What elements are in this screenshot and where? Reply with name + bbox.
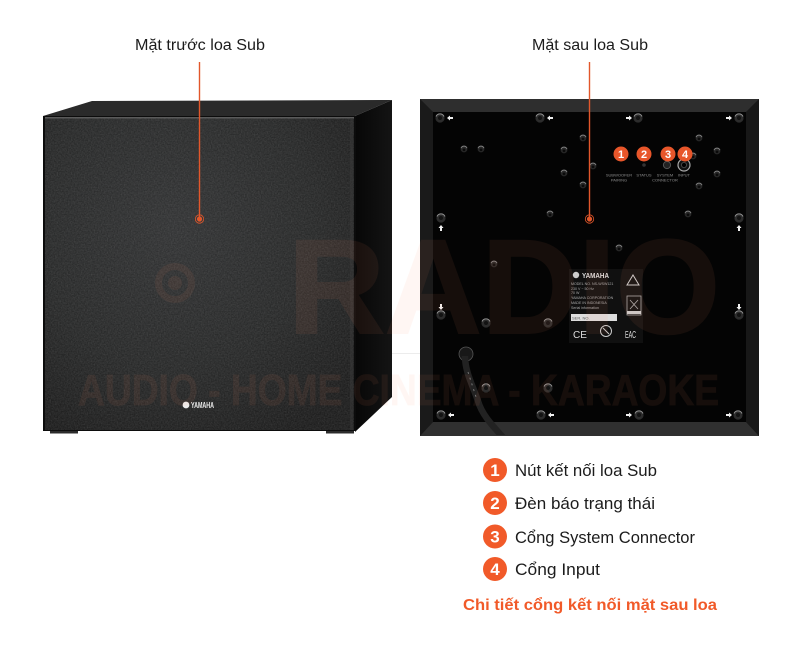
connector labels: SUBWOOFER [606, 172, 632, 178]
legend item 2: 2 [490, 494, 500, 513]
legend item 1: Nút kết nối loa Sub [515, 462, 657, 480]
rating label: MODEL NO. NS-WSW121 [571, 282, 613, 286]
panel: front of subwoofer [43, 100, 392, 434]
numbered markers on back panel: 3 [665, 149, 671, 161]
rating label: EAC [625, 330, 636, 341]
connector labels: SYSTEM [657, 172, 673, 178]
callout line: back [585, 62, 594, 223]
callout: front heading: Mặt trước loa Sub [135, 37, 265, 54]
watermark [78, 213, 720, 415]
connectors [642, 159, 690, 171]
cabinet right side [355, 100, 392, 432]
Yamaha front badge: YAMAHA [191, 401, 214, 410]
connector labels: INPUT [678, 172, 691, 178]
watermark RADIO: RADIO [288, 213, 720, 362]
cabinet top face [43, 100, 392, 116]
speaker grille [43, 116, 356, 431]
callout line: front [195, 62, 204, 223]
legend item 2: Đèn báo trạng thái [515, 495, 655, 513]
connector labels: PAIRING [611, 178, 627, 182]
legend item 4: 4 [490, 560, 500, 579]
rating label: MADE IN INDONESIA [571, 301, 607, 305]
legend item 3: 3 [490, 528, 500, 546]
callout: back heading: Mặt sau loa Sub [532, 37, 648, 54]
rating label: SER. NO. [572, 316, 590, 320]
rating label: CE [573, 330, 587, 341]
numbered markers on back panel: 2 [641, 149, 647, 161]
legend item 1: 1 [490, 461, 500, 480]
legend item 4: Cổng Input [515, 561, 600, 579]
legend item 3: Cổng System Connector [515, 529, 695, 547]
rating label: 70 W [571, 291, 580, 295]
legend item 2 [483, 491, 655, 515]
rating label: YAMAHA [582, 271, 609, 280]
feet [50, 431, 354, 434]
numbered markers on back panel: 4 [682, 149, 689, 161]
small white arrows [438, 116, 742, 418]
connector labels: STATUS [636, 172, 652, 178]
rating label: YAMAHA CORPORATION [571, 296, 614, 300]
numbered markers on back panel: 1 [618, 149, 624, 161]
panel: back of subwoofer [420, 99, 759, 443]
black back plate [433, 112, 746, 422]
power cable [458, 346, 505, 435]
legend item 4 [483, 557, 600, 581]
mounting screws [435, 113, 744, 420]
connector labels: CONNECTOR [652, 178, 678, 182]
watermark logo ring [158, 266, 192, 300]
legend item 3 [483, 524, 695, 548]
rating label [569, 269, 643, 343]
connector labels [606, 172, 691, 182]
infographic canvas [43, 38, 759, 614]
legend item 1 [483, 458, 657, 482]
rating label: Serial information [571, 306, 599, 310]
caption: Chi tiết cổng kết nối mặt sau loa [463, 596, 717, 614]
rating label: 230 V ~ 50 Hz [571, 287, 594, 291]
numbered markers on back panel [614, 146, 692, 162]
Yamaha front badge [183, 401, 214, 410]
wood frame [420, 99, 759, 436]
legend list [483, 458, 695, 581]
